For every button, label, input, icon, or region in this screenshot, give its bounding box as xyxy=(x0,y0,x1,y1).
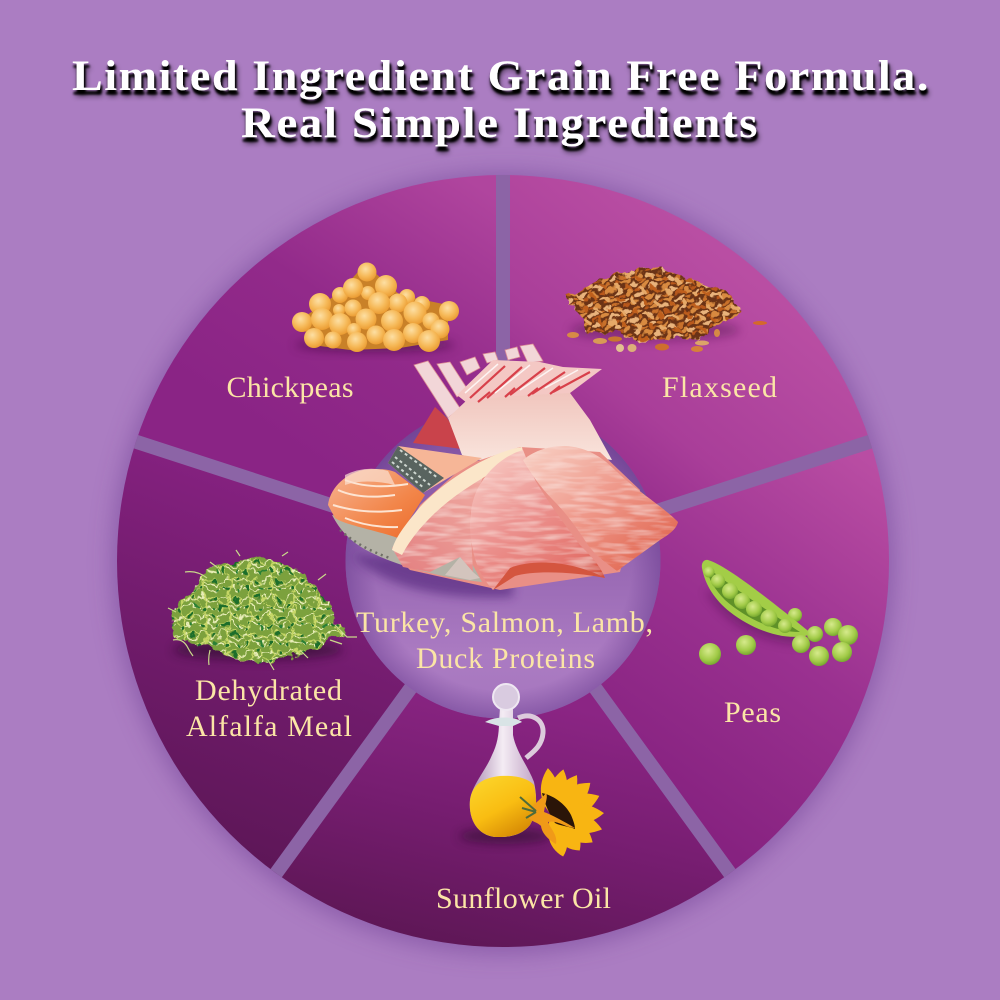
icon: meats (lamb, salmon, duck, turkey) xyxy=(328,344,678,598)
icon: flaxseed xyxy=(567,267,767,352)
segment: sunflower oil xyxy=(276,561,730,947)
label: sunflower oil: Sunflower Oil xyxy=(436,882,611,915)
segment: flaxseed xyxy=(503,175,870,561)
icon: chickpeas xyxy=(292,262,459,352)
label: dehydrated alfalfa meal xyxy=(186,674,352,743)
segment: peas xyxy=(503,442,889,873)
bottle handle xyxy=(518,716,543,758)
label: peas: Peas xyxy=(724,696,781,729)
salmon steak skin xyxy=(332,515,482,582)
label: dehydrated alfalfa meal: Dehydrated xyxy=(195,674,342,707)
lamb rack body xyxy=(448,390,612,460)
shadow xyxy=(353,555,513,598)
lamb rib tops xyxy=(457,360,602,403)
turkey piece front xyxy=(470,450,605,590)
label: centre proteins xyxy=(356,606,653,675)
title: Limited Ingredient Grain Free Formula. xyxy=(72,53,930,100)
label: centre proteins: Turkey, Salmon, Lamb, xyxy=(356,606,653,639)
title: Real Simple Ingredients xyxy=(241,100,759,147)
centre hub xyxy=(346,404,660,718)
segment: dehydrated alfalfa meal xyxy=(117,442,503,873)
meat filler xyxy=(392,447,640,590)
title xyxy=(72,53,930,147)
icon: oil bottle with sunflower xyxy=(459,684,605,859)
pod xyxy=(702,560,812,637)
lamb back xyxy=(413,407,468,450)
icon: pea pod and peas xyxy=(699,560,858,666)
duck breast xyxy=(392,447,525,580)
bottle xyxy=(470,708,536,837)
salmon slice xyxy=(388,446,482,493)
label: centre proteins: Duck Proteins xyxy=(416,642,595,675)
salmon steak xyxy=(328,469,425,538)
ingredient wheel xyxy=(113,173,893,953)
label: flaxseed: Flaxseed xyxy=(662,371,777,404)
label: chickpeas: Chickpeas xyxy=(226,371,354,404)
label: dehydrated alfalfa meal: Alfalfa Meal xyxy=(186,710,352,743)
rib bones xyxy=(414,344,543,418)
turkey piece rear xyxy=(523,446,678,571)
icon: alfalfa sprouts xyxy=(168,550,357,670)
sunflower xyxy=(520,767,605,859)
segment: chickpeas xyxy=(136,175,503,561)
